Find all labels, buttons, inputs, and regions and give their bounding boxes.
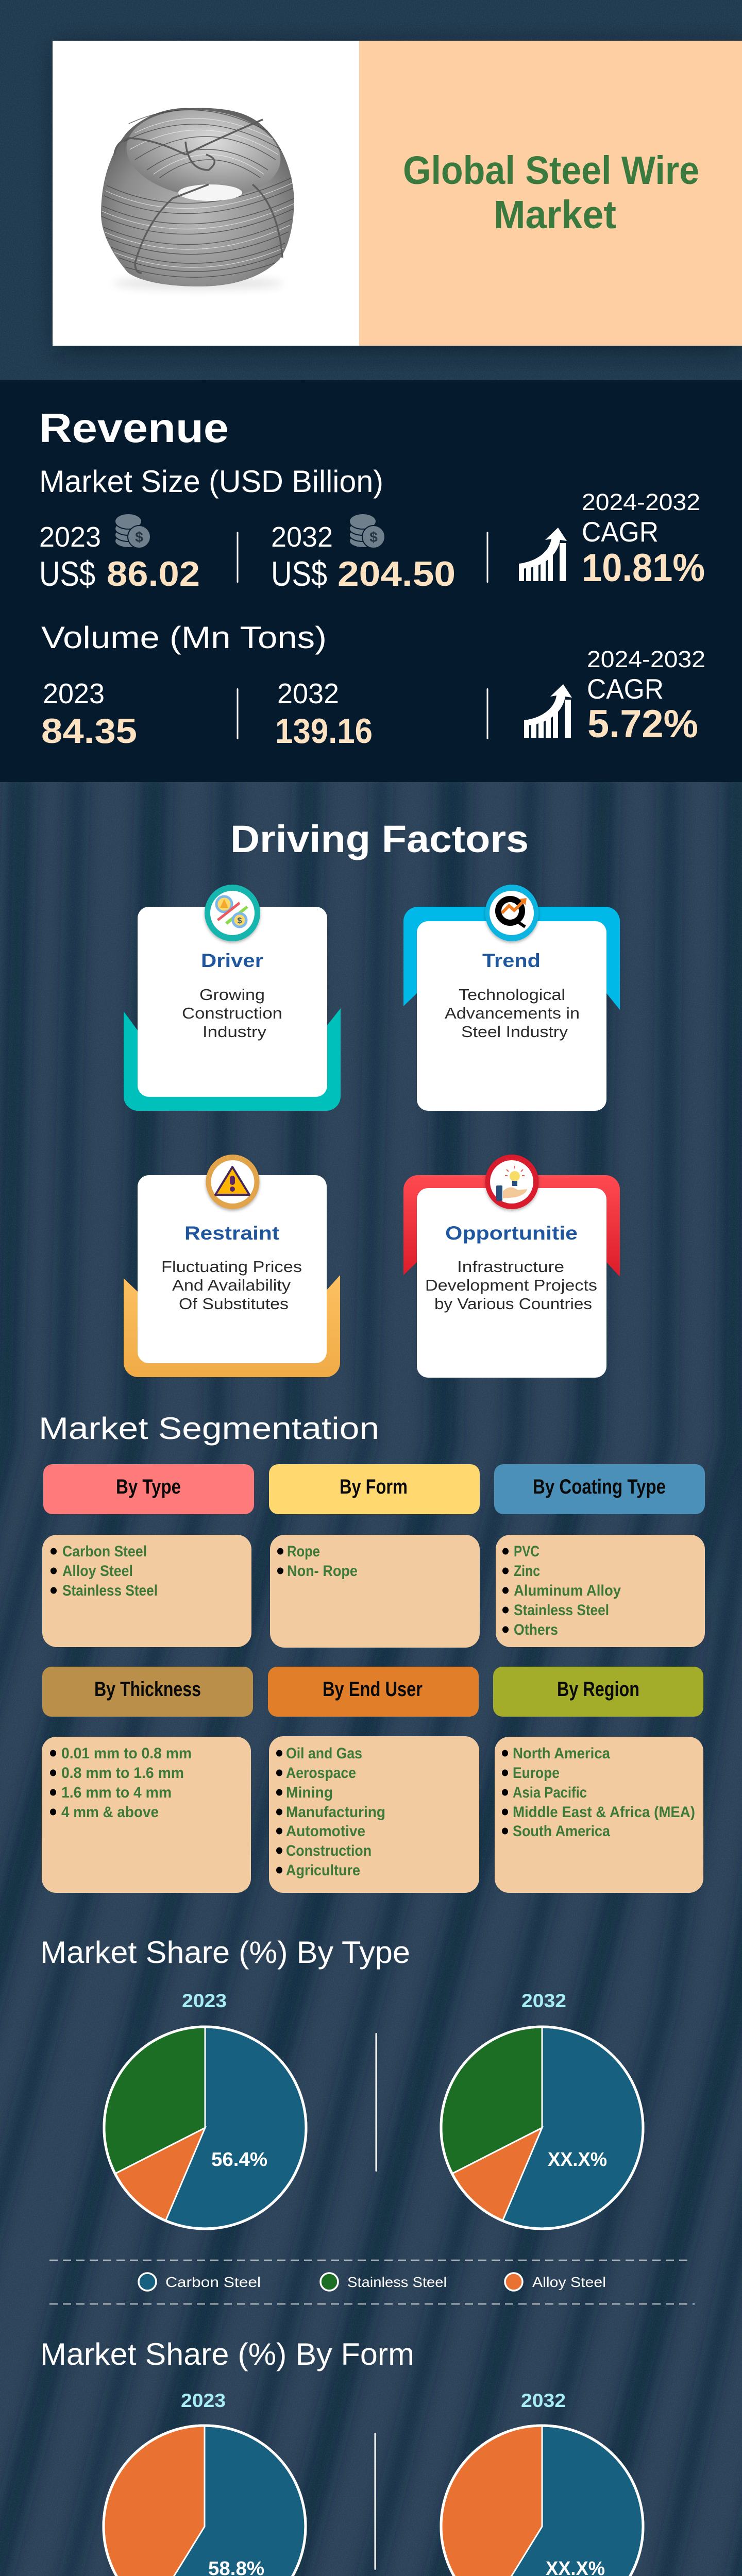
card text: restraint: Fluctuating Prices (161, 1258, 302, 1276)
stat: 2023 volume: 2023 (43, 677, 105, 709)
pie chart: type 2032 (441, 2027, 643, 2229)
list: thickness: 0.8 mm to 1.6 mm (61, 1765, 184, 1782)
list: end user: Mining (286, 1784, 333, 1801)
title: Global Steel Wire (403, 148, 699, 193)
list: end user (276, 1745, 385, 1879)
panel: hero (53, 41, 742, 352)
stat: 2023 revenue: US$ (39, 554, 95, 594)
panel: segment by coating type (494, 1464, 705, 1647)
title (403, 148, 699, 237)
pie chart: type 2023 (104, 2027, 306, 2229)
stat: 2023 revenue: 86.02 (107, 554, 200, 594)
list: region: South America (513, 1823, 610, 1840)
heading: market size: Market Size (USD Billion) (39, 464, 383, 499)
list: type: Stainless Steel (62, 1582, 158, 1599)
panel: driver card (124, 885, 341, 1111)
panel: segment by region: By Region (557, 1678, 639, 1701)
legend: type: Alloy Steel (532, 2274, 606, 2290)
stat: volume cagr (587, 646, 705, 746)
icon: opportunity (485, 1155, 539, 1209)
year label 2023: 2023 (182, 1990, 227, 2011)
stat: 2032 revenue: US$ (271, 554, 327, 594)
list: region (502, 1745, 695, 1840)
list: region: Asia Pacific (513, 1784, 587, 1801)
divider (486, 688, 488, 739)
divider (237, 688, 238, 739)
list: coating (502, 1543, 621, 1638)
icon: driver (205, 885, 260, 941)
icon: growth arrow volume (524, 684, 572, 738)
card title: opportunitie: Opportunitie (445, 1223, 578, 1244)
panel: segment by region (493, 1667, 703, 1893)
card text: restraint: Of Substitutes (179, 1295, 289, 1313)
list: end user: Automotive (286, 1823, 365, 1840)
panel: segment by form (269, 1464, 480, 1648)
stat: revenue cagr: CAGR (582, 516, 659, 548)
card text: driver: Construction (182, 1004, 282, 1022)
legend: type: Carbon Steel (165, 2274, 261, 2290)
title: Market (494, 193, 616, 237)
stat: 2023 revenue: 2023 (39, 521, 101, 553)
list: form: Rope (287, 1543, 320, 1560)
list: thickness (50, 1745, 192, 1821)
legend: type (49, 2260, 695, 2304)
year label 2023: 2023 (181, 2390, 226, 2411)
card text: driver: Industry (203, 1023, 267, 1041)
icon: coins 2023: $ (135, 529, 143, 545)
list: type (50, 1543, 158, 1599)
list: end user: Construction (286, 1842, 372, 1859)
year label 2032: 2032 (521, 1990, 566, 2011)
card text: opportunity: Development Projects (425, 1276, 597, 1294)
list: type: Carbon Steel (62, 1543, 147, 1560)
list: end user: Oil and Gas (286, 1745, 362, 1762)
icon: growth arrow revenue (519, 528, 567, 581)
panel: trend card (403, 885, 620, 1111)
stat: revenue cagr (582, 489, 705, 590)
list: coating: Stainless Steel (514, 1602, 609, 1619)
stat: revenue cagr: 2024-2032 (582, 489, 700, 515)
stat: 2023 volume: 84.35 (41, 711, 137, 751)
list: end user: Manufacturing (286, 1804, 385, 1821)
list: region: Middle East & Africa (MEA) (513, 1804, 695, 1821)
heading: market share by form: Market Share (%) By Form (40, 2337, 414, 2371)
panel: segment by thickness (42, 1667, 253, 1893)
stat: 2023 volume (41, 677, 137, 751)
heading: revenue: Revenue (39, 405, 229, 451)
card title: driver: Driver (201, 950, 263, 971)
icon: coins 2023 (115, 514, 150, 548)
list: thickness: 4 mm & above (61, 1804, 159, 1821)
stat: revenue cagr: 10.81% (582, 546, 705, 590)
panel: segment by thickness: By Thickness (94, 1678, 201, 1701)
pie chart: form 2032 (441, 2426, 643, 2576)
panel: segment by form: By Form (340, 1476, 408, 1498)
list: thickness: 0.01 mm to 0.8 mm (61, 1745, 192, 1762)
list: coating: Zinc (514, 1563, 540, 1580)
card text: trend (445, 986, 580, 1041)
heading: volume: Volume (Mn Tons) (41, 620, 327, 655)
list: region: North America (513, 1745, 610, 1762)
stat: 2032 volume: 139.16 (275, 711, 373, 751)
legend: type: Stainless Steel (347, 2274, 447, 2290)
heading: market share by type: Market Share (%) By Type (40, 1935, 410, 1970)
pie chart: form 2023 (104, 2426, 306, 2576)
panel: segment by type: By Type (116, 1476, 181, 1498)
panel: revenue and volume (0, 380, 742, 782)
divider (374, 2433, 376, 2570)
panel: segment by end user: By End User (323, 1678, 423, 1701)
list: region: Europe (513, 1765, 560, 1782)
divider (237, 532, 238, 583)
pie chart: type 2032: XX.X% (548, 2149, 607, 2171)
list: coating: Others (514, 1621, 558, 1638)
card text: driver (182, 986, 282, 1041)
list: end user: Aerospace (286, 1765, 356, 1782)
list: end user: Agriculture (286, 1862, 360, 1879)
icon: coins 2032: $ (369, 529, 378, 545)
list: form (277, 1543, 358, 1580)
card title: restraint: Restraint (184, 1223, 279, 1244)
panel: opportunity card (403, 1155, 620, 1378)
icon: coins 2032 (349, 514, 385, 548)
panel: segment by coating type: By Coating Type (533, 1476, 666, 1498)
stat: 2032 revenue (271, 521, 456, 594)
card text: trend: Steel Industry (461, 1023, 568, 1041)
panel: segment by type (42, 1464, 254, 1647)
icon: restraint (206, 1155, 260, 1209)
stat: volume cagr: CAGR (587, 673, 664, 705)
card text: driver: Growing (199, 986, 265, 1004)
divider (486, 532, 488, 583)
list: thickness: 1.6 mm to 4 mm (61, 1784, 172, 1801)
icon: steel wire coil (101, 103, 294, 290)
heading: market segmentation: Market Segmentation (39, 1411, 379, 1446)
stat: 2032 revenue: 2032 (271, 521, 333, 553)
stat: 2032 volume (275, 677, 373, 751)
divider (375, 2033, 377, 2172)
list: form: Non- Rope (287, 1563, 358, 1580)
card text: trend: Advancements in (445, 1004, 580, 1022)
heading: driving factors: Driving Factors (230, 818, 529, 860)
hero photo panel (53, 41, 359, 346)
stat: 2032 revenue: 204.50 (338, 554, 456, 594)
stat: volume cagr: 2024-2032 (587, 646, 705, 672)
list: type: Alloy Steel (62, 1563, 133, 1580)
panel: restraint card (124, 1155, 340, 1377)
icon: driver: $ (238, 917, 242, 925)
list: coating: PVC (514, 1543, 539, 1560)
card title: trend: Trend (482, 950, 541, 971)
card text: restraint (161, 1258, 302, 1313)
hero title panel (359, 41, 742, 346)
year label 2032: 2032 (521, 2390, 566, 2411)
card text: opportunity: by Various Countries (434, 1295, 592, 1313)
pie chart: type 2023: 56.4% (211, 2149, 267, 2171)
stat: 2023 revenue (39, 521, 200, 594)
card text: restraint: And Availability (172, 1276, 291, 1294)
panel: segment by end user (268, 1667, 479, 1893)
list: coating: Aluminum Alloy (514, 1582, 621, 1599)
card text: trend: Technological (459, 986, 565, 1004)
icon: trend (485, 885, 539, 941)
stat: 2032 volume: 2032 (277, 677, 339, 709)
card text: opportunity (425, 1258, 597, 1313)
stat: volume cagr: 5.72% (587, 702, 698, 746)
card text: opportunity: Infrastructure (457, 1258, 564, 1276)
